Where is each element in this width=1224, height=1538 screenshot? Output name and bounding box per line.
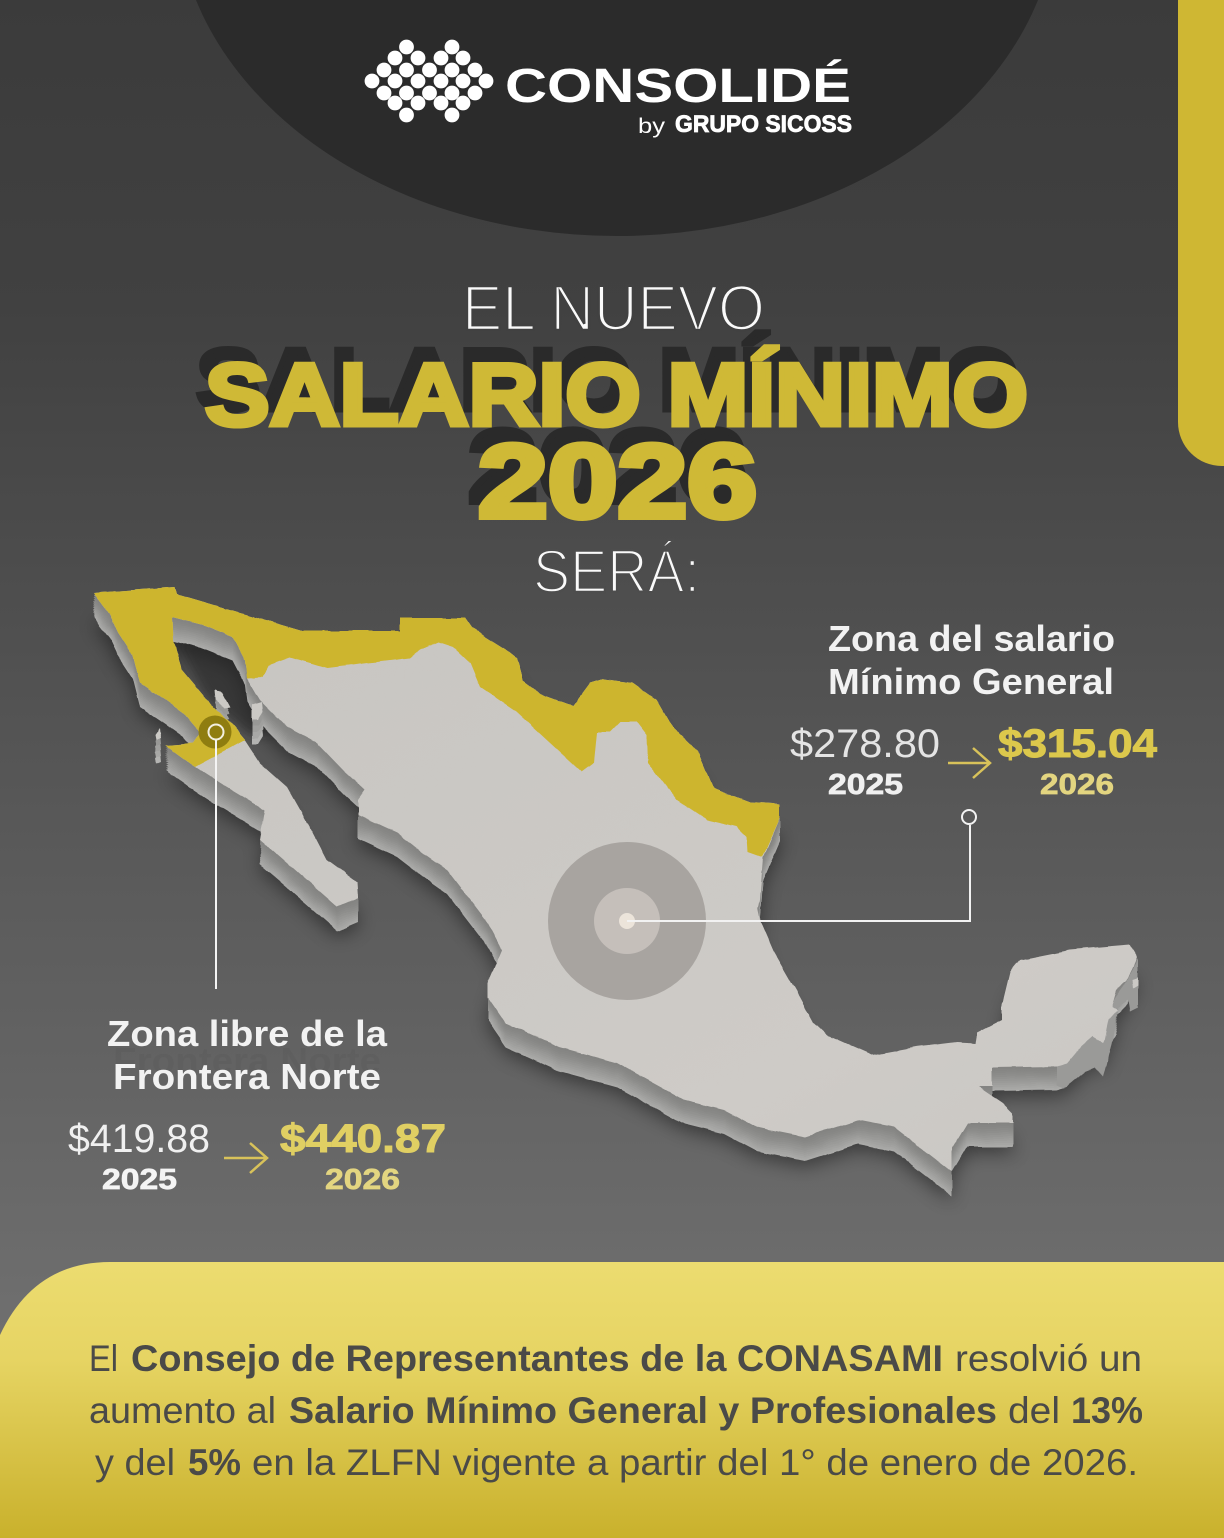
callout heading: Frontera Norte [113,1056,381,1097]
title line: 2026: 2026 [478,424,757,540]
title line: Salario mínimo: SALARIO MÍNIMO [205,345,1028,444]
northern border free zone [93,587,780,857]
summary line 3: 5% [188,1442,241,1483]
value 2025: 2025 [828,769,903,801]
panel: summary [0,1262,1224,1538]
value 2026: 2026 [325,1164,400,1196]
title [196,272,1028,605]
callout heading: Frontera Norte [113,1040,381,1081]
callout heading: Zona libre de la [107,1013,388,1054]
title shadow [196,330,1019,525]
callout: general minimum wage zone [790,618,1158,801]
value 2026: $440.87 [280,1117,446,1161]
callout: northern border free zone [68,1013,446,1196]
map top surface [93,587,1137,1172]
map extruded walls [93,589,1138,1196]
summary line 2: 13% [1071,1390,1143,1431]
summary line 1: Consejo de Representantes de la CONASAMI [131,1338,943,1379]
title shadow: 2026 [468,409,747,525]
marker: free zone pin [198,716,232,989]
title line: será: SERÁ: [533,538,700,605]
summary line 3: y del [95,1442,175,1483]
callout heading: Mínimo General [828,661,1114,702]
value 2025 [790,722,940,801]
summary text [89,1338,1143,1483]
arrow [224,1143,267,1173]
summary line 2: del [1008,1390,1060,1431]
value 2026: 2026 [1040,769,1114,801]
header dark ellipse [176,0,1058,236]
value 2025: $419.88 [68,1117,210,1161]
value 2026 [998,722,1158,801]
callout heading: Zona del salario [828,618,1115,659]
summary line 1: El [89,1338,118,1379]
map shapes [93,587,1138,1196]
map of Mexico [93,587,1138,1202]
title shadow: SALARIO MÍNIMO [196,330,1019,429]
icon: dot diamond mark [365,40,493,122]
logo wordmark: CONSOLIDÉ [505,59,851,113]
summary line 2 [89,1390,1143,1431]
value 2025: $278.80 [790,722,940,766]
map drop shadow [93,617,1137,1202]
value 2026 [280,1117,446,1196]
callout heading [107,1013,388,1097]
marker: general zone target [548,810,976,1000]
summary line 2: aumento al [89,1390,276,1431]
small islands and cays [155,690,1138,988]
logo byline: GRUPO SICOSS [675,111,852,138]
summary line 1: resolvió un [955,1338,1142,1379]
callout heading [828,618,1115,702]
value 2025: 2025 [102,1164,177,1196]
arrow [948,748,990,778]
summary line 2: Salario Mínimo General y Profesionales [289,1390,997,1431]
logo byline: by [638,115,666,138]
summary line 3: en la ZLFN vigente a partir del 1° de enero de 2026. [252,1442,1138,1483]
value 2025 [68,1117,210,1196]
yellow corner tab [1178,0,1224,466]
logo: Consolidé by Grupo Sicoss [365,40,852,138]
title line: El nuevo: EL NUEVO [462,272,765,344]
value 2026: $315.04 [998,722,1158,766]
